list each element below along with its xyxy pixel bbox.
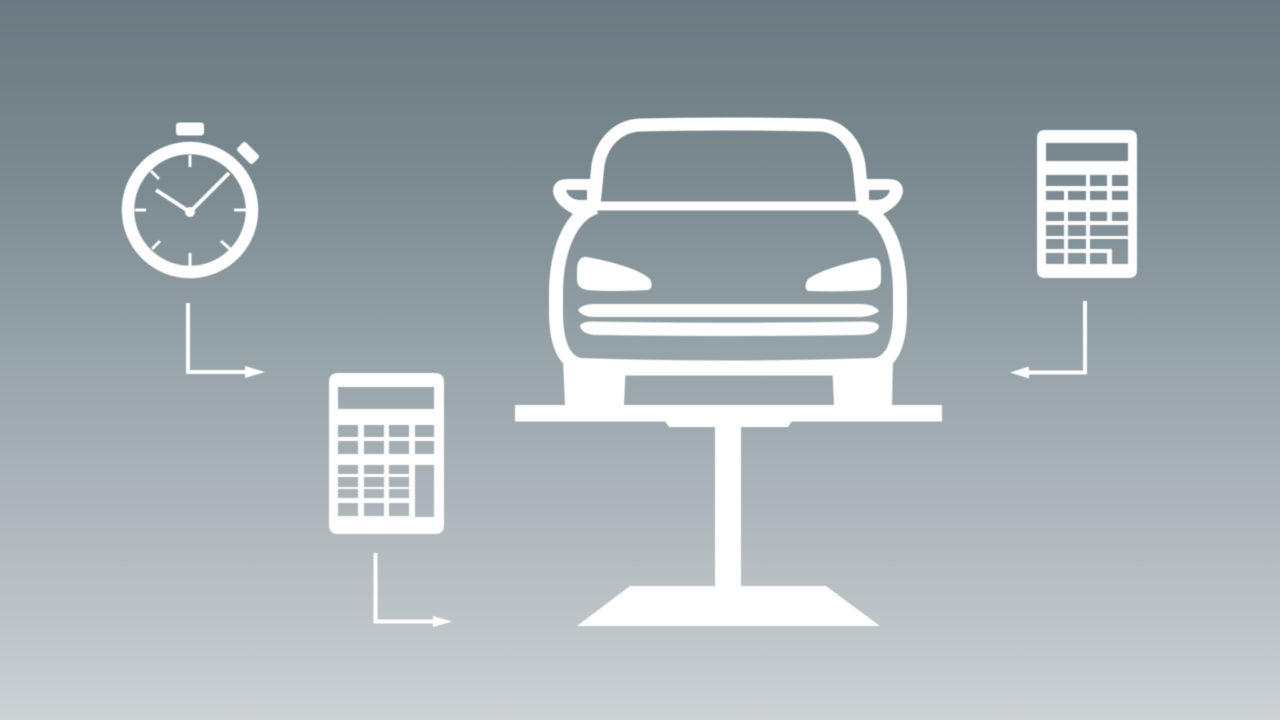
car: right headlight xyxy=(806,258,881,291)
arrow: left calculator to lift xyxy=(376,553,452,627)
car: upper grille xyxy=(578,304,879,317)
lift: platform xyxy=(515,405,942,422)
car: right wheel xyxy=(832,360,893,405)
car: roof and windscreen xyxy=(594,124,863,205)
car: body outline xyxy=(556,207,900,368)
icon: calculator left xyxy=(329,373,444,534)
lift: post xyxy=(715,426,741,588)
arrow: right calculator to lift xyxy=(1010,301,1085,378)
car: lower bumper bar xyxy=(600,362,860,376)
lift: platform bracket xyxy=(665,421,792,427)
car: lower grille xyxy=(580,321,879,336)
lift: base xyxy=(577,586,880,626)
icon: calculator right xyxy=(1037,130,1137,278)
car on lift xyxy=(515,124,942,626)
arrow: stopwatch to lift xyxy=(188,303,265,378)
car: left headlight xyxy=(577,257,652,291)
car: windscreen base line xyxy=(590,202,866,210)
icon: stopwatch xyxy=(128,122,260,272)
car: right mirror xyxy=(864,179,903,215)
car: left mirror xyxy=(553,179,592,215)
car: left wheel xyxy=(563,360,626,405)
